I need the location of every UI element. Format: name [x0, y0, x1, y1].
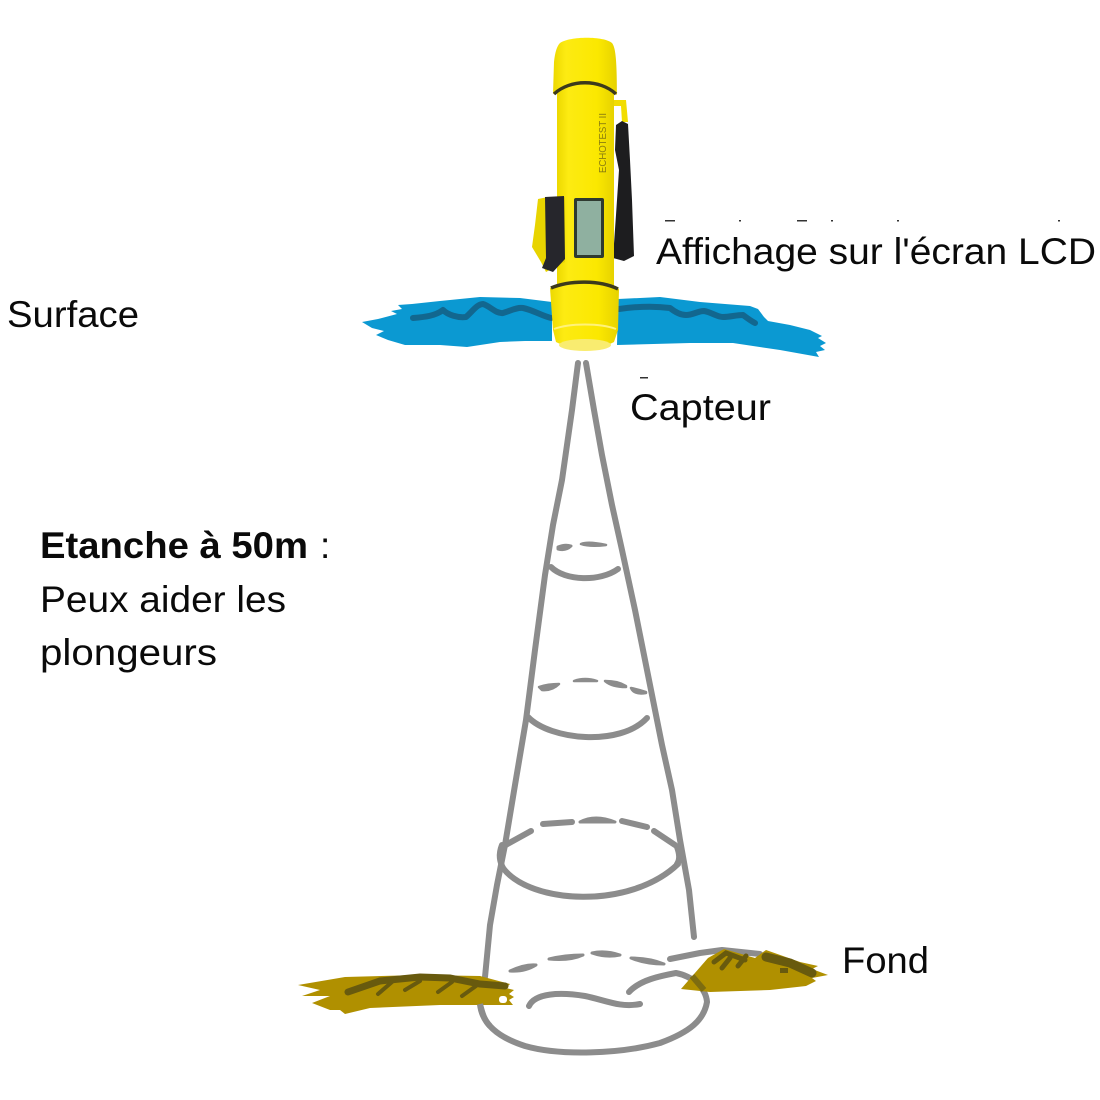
bottom ring — [480, 950, 760, 1052]
text block: waterproof: : — [320, 525, 330, 566]
text block: waterproof: plongeurs — [40, 632, 217, 673]
water dark line — [413, 304, 755, 323]
ring 3 — [500, 818, 679, 897]
bottom cap — [550, 282, 619, 348]
seabed left — [298, 975, 514, 1026]
text block: waterproof: Etanche à 50m — [40, 525, 308, 566]
main body — [557, 82, 614, 292]
sonar beam cone — [480, 363, 760, 1052]
top cap — [553, 38, 617, 95]
sensor tip — [559, 339, 611, 351]
label: Surface: Surface — [7, 294, 139, 335]
water surface brush stroke — [362, 297, 826, 357]
LCD screen — [574, 198, 604, 258]
seabed right — [681, 949, 828, 992]
label: LCD display: Affichage sur l'écran LCD — [656, 231, 1096, 272]
text block: waterproof: Peux aider les — [40, 579, 286, 620]
handheld sonar device — [532, 38, 634, 351]
ring 1 — [551, 543, 618, 578]
strap clip — [612, 100, 628, 122]
side button — [532, 197, 565, 272]
model label: ECHOTEST II — [598, 113, 609, 173]
text block: waterproof — [40, 525, 330, 673]
wrist strap — [613, 121, 634, 261]
label: bottom: Fond — [842, 940, 929, 981]
clipped text fragments — [640, 220, 1060, 378]
cone edges — [485, 363, 694, 977]
ring 2 — [528, 679, 647, 737]
label: sensor: Capteur — [630, 387, 771, 428]
